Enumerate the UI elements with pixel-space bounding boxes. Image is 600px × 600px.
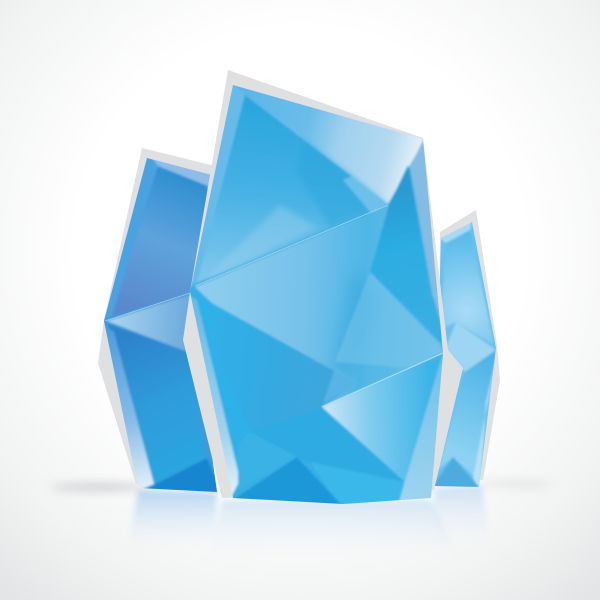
left band: [191, 85, 246, 288]
small light triangle: [324, 370, 356, 403]
lower-left facet: [206, 330, 249, 456]
lower facet: [108, 324, 206, 484]
upper-left facet: [196, 96, 368, 284]
bright facet at right: [335, 272, 443, 368]
lower right band: [398, 353, 443, 505]
top band: [236, 86, 424, 205]
lower-left light rim: [190, 295, 240, 498]
crystal reflections: [128, 486, 490, 560]
upper dark overlay: [296, 140, 388, 228]
ridge lower: [322, 353, 443, 407]
upper facet: [440, 230, 494, 345]
lower facet: [438, 350, 496, 480]
top rim: [152, 160, 210, 190]
light patch on left facet: [213, 204, 316, 278]
right-side light band: [409, 139, 440, 326]
lower-centre wedge: [194, 295, 343, 407]
right light rim: [472, 362, 494, 487]
middle facet: [445, 322, 496, 372]
ridge upper: [195, 205, 388, 286]
blue body: [435, 222, 496, 487]
bottom facet: [435, 458, 479, 487]
lower middle facet: [254, 408, 404, 483]
bright lower facet: [321, 364, 427, 482]
back-left crystal: [95, 148, 225, 500]
base: [190, 96, 443, 498]
lower left soft facet: [236, 434, 249, 484]
ridge: [105, 293, 190, 321]
middle facet: [107, 293, 195, 352]
dark centre shade: [330, 278, 364, 374]
grey backing: [440, 210, 500, 480]
bottom dark facet: [225, 457, 346, 510]
top rim: [441, 222, 472, 244]
back-right crystal: [430, 210, 500, 490]
grey backing: [98, 148, 218, 494]
lower rim: [100, 321, 154, 492]
blue body: [104, 187, 216, 488]
central facet: [195, 205, 443, 407]
main crystal: [180, 70, 463, 510]
grey backing: [183, 70, 463, 498]
bottom facet: [148, 458, 217, 492]
light sliver: [343, 176, 388, 214]
left rim: [105, 158, 158, 318]
right-side inner facet: [370, 165, 440, 345]
lower bright band: [313, 464, 402, 504]
floor shadows: [50, 482, 553, 490]
upper facet: [112, 166, 208, 316]
